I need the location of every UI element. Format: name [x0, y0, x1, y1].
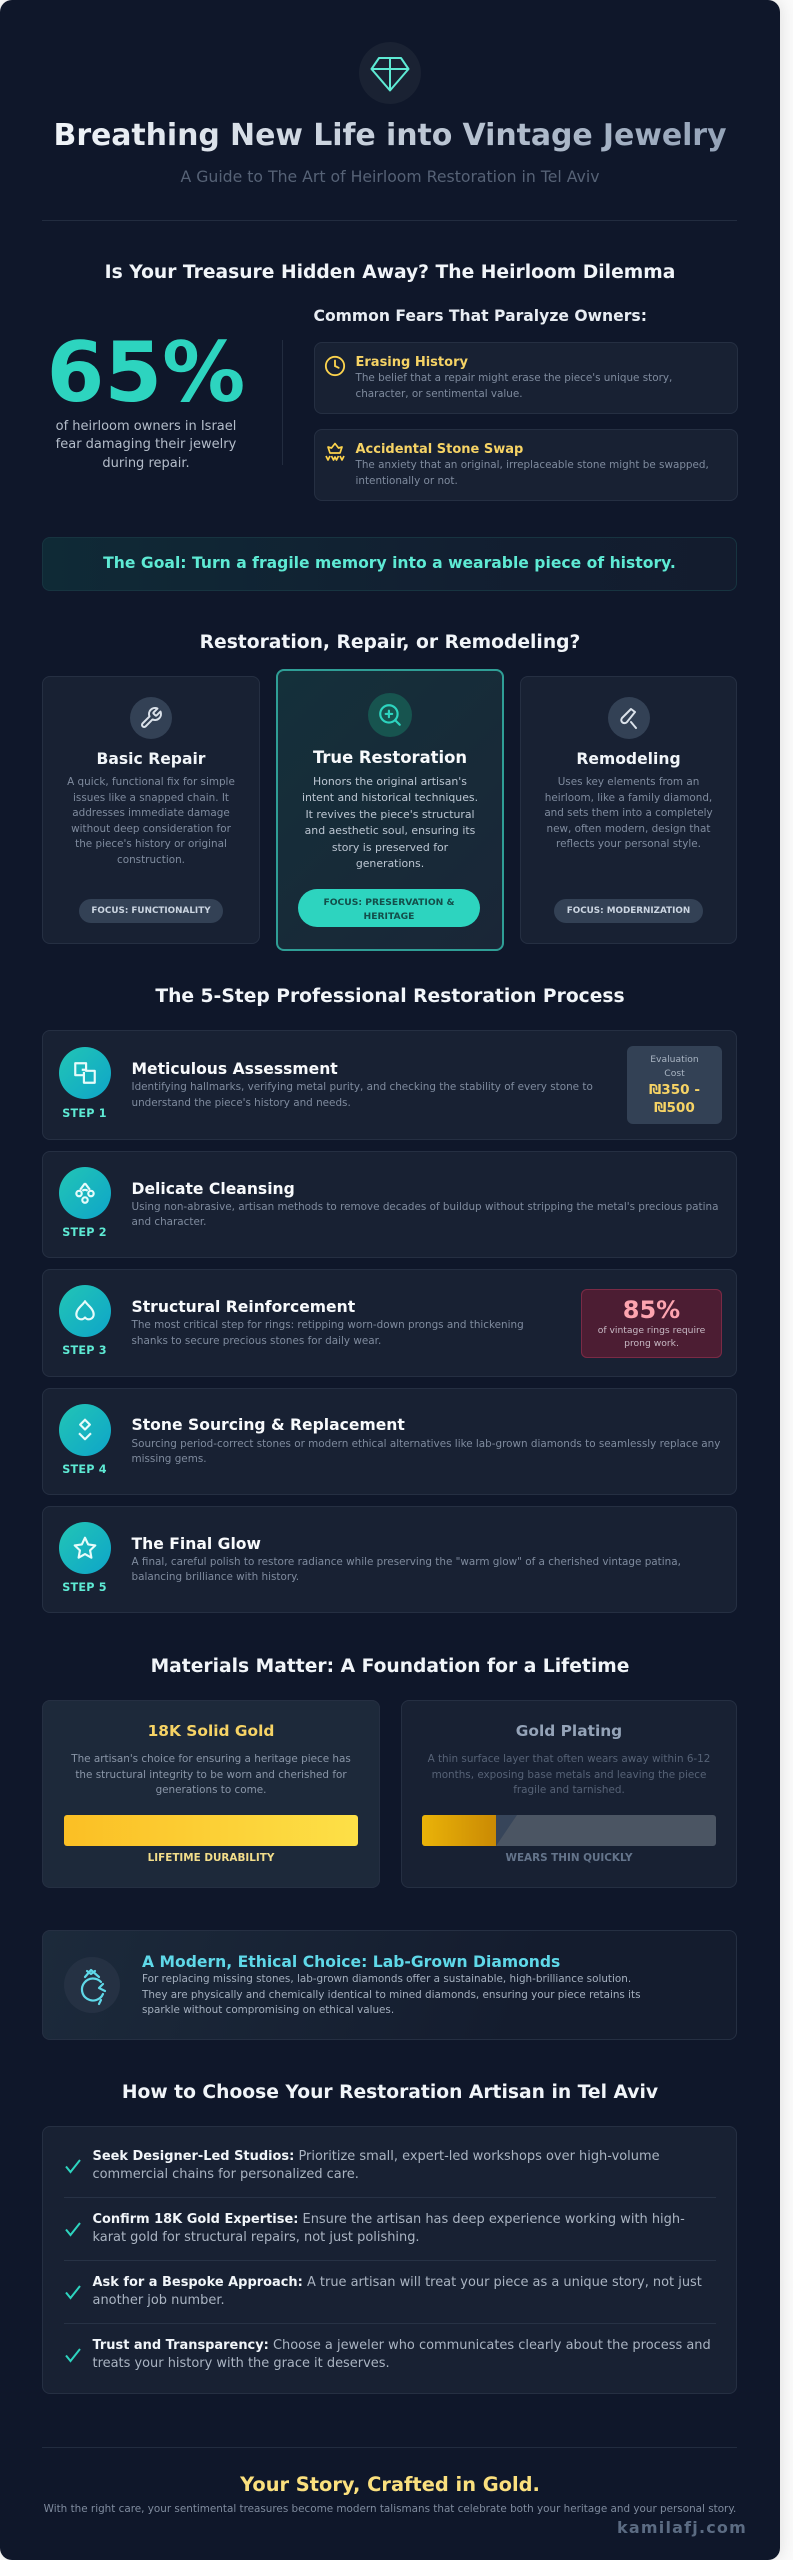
step 5 panel	[42, 1506, 737, 1613]
step 2 description: and character.	[132, 1216, 206, 1228]
heading: heirloom dilemma: Is Your Treasure Hidden Away? The Heirloom Dilemma	[105, 262, 675, 283]
card description: construction.	[117, 854, 185, 866]
callout: evaluation cost: Evaluation	[650, 1054, 699, 1065]
cost range: ₪350 -	[649, 1082, 700, 1098]
checklist item 4: Trust and Transparency: Choose a jeweler who communicates clearly about the process and	[92, 2338, 711, 2353]
icon: gem swap	[325, 442, 345, 461]
checklist item 1	[65, 2149, 660, 2182]
callout text: For replacing missing stones, lab-grown diamonds offer a sustainable, high-brilliance solution.	[142, 1973, 631, 1985]
callout caption: of vintage rings require	[598, 1324, 705, 1336]
step 2 panel	[42, 1151, 737, 1258]
card description	[67, 776, 235, 866]
checklist item 1: commercial chains for personalized care.	[92, 2167, 359, 2182]
material description	[428, 1753, 710, 1796]
footer title: Your Story, Crafted in Gold.	[240, 2473, 540, 2496]
callout: 85 percent: 85%	[623, 1296, 680, 1324]
card title: True Restoration	[313, 748, 467, 767]
callout: the goal	[42, 537, 737, 591]
step 3 icon	[59, 1285, 111, 1337]
callout text: sparkle without compromising on ethical values.	[142, 2004, 394, 2016]
step 1 description	[132, 1081, 593, 1109]
step 5 description: balancing brilliance with history.	[132, 1571, 299, 1583]
step 4 description: missing gems.	[132, 1453, 207, 1465]
step 2 description: Using non-abrasive, artisan methods to remove decades of buildup without stripping the metal's precious patina	[132, 1200, 718, 1212]
fear description	[356, 459, 709, 487]
callout title: A Modern, Ethical Choice: Lab-Grown Diamonds	[142, 1953, 560, 1971]
callout: evaluation cost: Cost	[664, 1068, 685, 1078]
check icon	[65, 2348, 81, 2362]
focus pill: FOCUS: PRESERVATION &	[323, 897, 455, 908]
icon: lab diamond	[64, 1957, 120, 2013]
step 1 description: understand the piece's history and needs.	[132, 1097, 351, 1109]
panel: true restoration	[276, 669, 504, 951]
icon: magnifier	[368, 693, 412, 737]
card title: Basic Repair	[96, 750, 206, 768]
panel: 18K solid gold	[42, 1700, 380, 1888]
bar label: LIFETIME DURABILITY	[148, 1852, 274, 1864]
check icon	[65, 2222, 81, 2236]
card description: Uses key elements from an	[558, 776, 699, 788]
heading: comparison: Restoration, Repair, or Remodeling?	[200, 632, 580, 653]
checklist item 2: karat gold for structural repairs, not just polishing.	[92, 2230, 420, 2245]
card description: generations.	[356, 857, 424, 870]
durability bar	[64, 1815, 358, 1846]
step 4 panel	[42, 1388, 737, 1495]
fear description: character, or sentimental value.	[356, 388, 523, 400]
card description: A quick, functional fix for simple	[67, 776, 235, 788]
card title: Remodeling	[576, 750, 681, 768]
stat caption: of heirloom owners in Israel	[56, 419, 236, 434]
card description: heirloom, like a family diamond,	[545, 792, 712, 804]
card description: and sets them into a completely	[544, 807, 713, 819]
focus pill	[79, 899, 223, 923]
checklist item 4	[65, 2338, 711, 2371]
step 1 description: Identifying hallmarks, verifying metal purity, and checking the stability of every stone to	[132, 1081, 593, 1093]
material description: generations to come.	[156, 1784, 266, 1796]
subtitle: A Guide to The Art of Heirloom Restoration in Tel Aviv	[180, 166, 599, 186]
heading: process: The 5-Step Professional Restoration Process	[155, 986, 625, 1007]
card description: and aesthetic soul, ensuring its	[305, 824, 475, 837]
step 4 label: STEP 4	[62, 1463, 107, 1476]
step 1 title: Meticulous Assessment	[132, 1060, 338, 1078]
material title: Gold Plating	[516, 1722, 622, 1740]
focus pill: FOCUS: FUNCTIONALITY	[91, 906, 211, 916]
checklist item 2: Confirm 18K Gold Expertise: Ensure the artisan has deep experience working with high-	[92, 2212, 685, 2227]
stat: 65 percent	[47, 324, 245, 471]
fear description: The belief that a repair might erase the piece's unique story,	[356, 372, 672, 384]
material title: 18K Solid Gold	[148, 1722, 274, 1740]
stat caption: fear damaging their jewelry	[56, 437, 236, 452]
panel: basic repair	[42, 676, 260, 944]
focus pill: HERITAGE	[364, 911, 414, 922]
stat caption	[56, 419, 236, 471]
icon: brush	[608, 697, 650, 739]
card description: new, often modern, design that	[547, 823, 710, 835]
card description: It revives the piece's structural	[305, 808, 475, 821]
step 4 title: Stone Sourcing & Replacement	[132, 1416, 405, 1434]
step 4 icon	[59, 1404, 111, 1456]
fear description	[356, 372, 672, 400]
callout: the goal: The Goal: Turn a fragile memory into a wearable piece of history.	[103, 554, 676, 572]
step 3 panel	[42, 1269, 737, 1377]
step 5 description: A final, careful polish to restore radiance while preserving the "warm glow" of a cherished vintage patina,	[132, 1556, 681, 1568]
step 3 description	[132, 1319, 524, 1347]
callout: 85 percent	[581, 1289, 722, 1358]
fear description: The anxiety that an original, irreplaceable stone might be swapped,	[356, 459, 709, 471]
material description: fragile and tarnished.	[513, 1784, 625, 1796]
focus pill: FOCUS: MODERNIZATION	[567, 906, 690, 916]
heading: choosing an artisan: How to Choose Your Restoration Artisan in Tel Aviv	[122, 2082, 658, 2103]
material description	[71, 1753, 351, 1796]
header icon: gem	[359, 42, 421, 104]
step 5 description	[132, 1556, 681, 1583]
material description: A thin surface layer that often wears away within 6-12	[428, 1753, 710, 1765]
title: Breathing New Life into Vintage Jewelry	[54, 118, 726, 153]
callout text: They are physically and chemically identical to mined diamonds, ensuring your piece retains its	[142, 1989, 641, 2001]
step 1 icon	[59, 1047, 111, 1099]
step 3 title: Structural Reinforcement	[132, 1298, 355, 1316]
material description: months, exposing base metals and leaving the piece	[432, 1769, 706, 1781]
step 3 description: The most critical step for rings: retipping worn-down prongs and thickening	[132, 1319, 524, 1331]
checklist item 4: treats your history with the grace it deserves.	[92, 2356, 390, 2371]
icon: wrench	[130, 697, 172, 739]
card description: addresses immediate damage	[72, 807, 230, 819]
panel: remodeling	[520, 676, 737, 944]
stat number: 65%	[47, 324, 245, 421]
step 3 description: shanks to secure precious stones for daily wear.	[132, 1335, 381, 1347]
panel: gold plating	[401, 1700, 737, 1888]
stat caption: during repair.	[102, 456, 190, 471]
fear description: intentionally or not.	[356, 475, 458, 487]
focus pill	[554, 899, 703, 923]
check icon	[65, 2285, 81, 2300]
step 5 icon	[59, 1522, 111, 1574]
checklist item 2	[65, 2212, 685, 2245]
step 4 description	[132, 1438, 720, 1465]
callout: evaluation cost	[627, 1046, 722, 1124]
heading: materials: Materials Matter: A Foundation for a Lifetime	[151, 1656, 629, 1677]
card description: story is preserved for	[332, 841, 448, 854]
step 1 panel	[42, 1030, 737, 1140]
fear title: Accidental Stone Swap	[356, 442, 523, 456]
check icon	[65, 2159, 81, 2174]
panel: lab-grown diamonds	[42, 1930, 737, 2040]
checklist item 3: Ask for a Bespoke Approach: A true artisan will treat your piece as a unique story, not just	[92, 2275, 702, 2290]
step 5 label: STEP 5	[62, 1581, 107, 1594]
heading: common fears: Common Fears That Paralyze Owners:	[314, 307, 647, 325]
callout text	[142, 1973, 641, 2016]
checklist item 3: another job number.	[92, 2293, 225, 2308]
card description: Honors the original artisan's	[313, 775, 467, 788]
step 3 label: STEP 3	[62, 1344, 107, 1357]
card description: intent and historical techniques.	[302, 791, 478, 804]
panel: accidental stone swap	[314, 429, 738, 501]
step 1 label: STEP 1	[62, 1107, 107, 1120]
checklist item 1: Seek Designer-Led Studios: Prioritize small, expert-led workshops over high-volume	[92, 2149, 660, 2164]
card description: issues like a snapped chain. It	[73, 792, 229, 804]
card description: without deep consideration for	[71, 823, 231, 835]
step 2 icon	[59, 1167, 111, 1219]
panel: checklist	[42, 2126, 737, 2394]
card description	[544, 776, 713, 850]
card description	[302, 775, 478, 870]
step 4 description: Sourcing period-correct stones or modern ethical alternatives like lab-grown diamonds to seamlessly replace any	[132, 1438, 720, 1450]
material description: The artisan's choice for ensuring a heritage piece has	[71, 1753, 351, 1765]
material description: the structural integrity to be worn and cherished for	[75, 1769, 347, 1781]
bar label: WEARS THIN QUICKLY	[505, 1852, 632, 1864]
footer text: With the right care, your sentimental treasures become modern talismans that celebrate both your heritage and your personal story.	[44, 2503, 736, 2515]
cost range: ₪500	[654, 1100, 695, 1116]
step 2 description	[132, 1200, 718, 1228]
step 2 label: STEP 2	[62, 1226, 107, 1239]
panel: erasing history	[314, 342, 738, 414]
card description: reflects your personal style.	[556, 838, 701, 850]
checklist item 3	[65, 2275, 702, 2308]
icon: clock	[324, 356, 346, 376]
fear title: Erasing History	[356, 354, 468, 370]
focus pill	[298, 889, 480, 927]
callout caption	[598, 1324, 705, 1349]
step 5 title: The Final Glow	[132, 1535, 261, 1553]
card description: the piece's history or original	[75, 838, 227, 850]
durability bar	[422, 1815, 716, 1846]
callout caption: prong work.	[624, 1338, 679, 1349]
watermark: kamilafj.com	[617, 2518, 747, 2537]
step 2 title: Delicate Cleansing	[132, 1180, 295, 1198]
cost range	[649, 1082, 700, 1116]
